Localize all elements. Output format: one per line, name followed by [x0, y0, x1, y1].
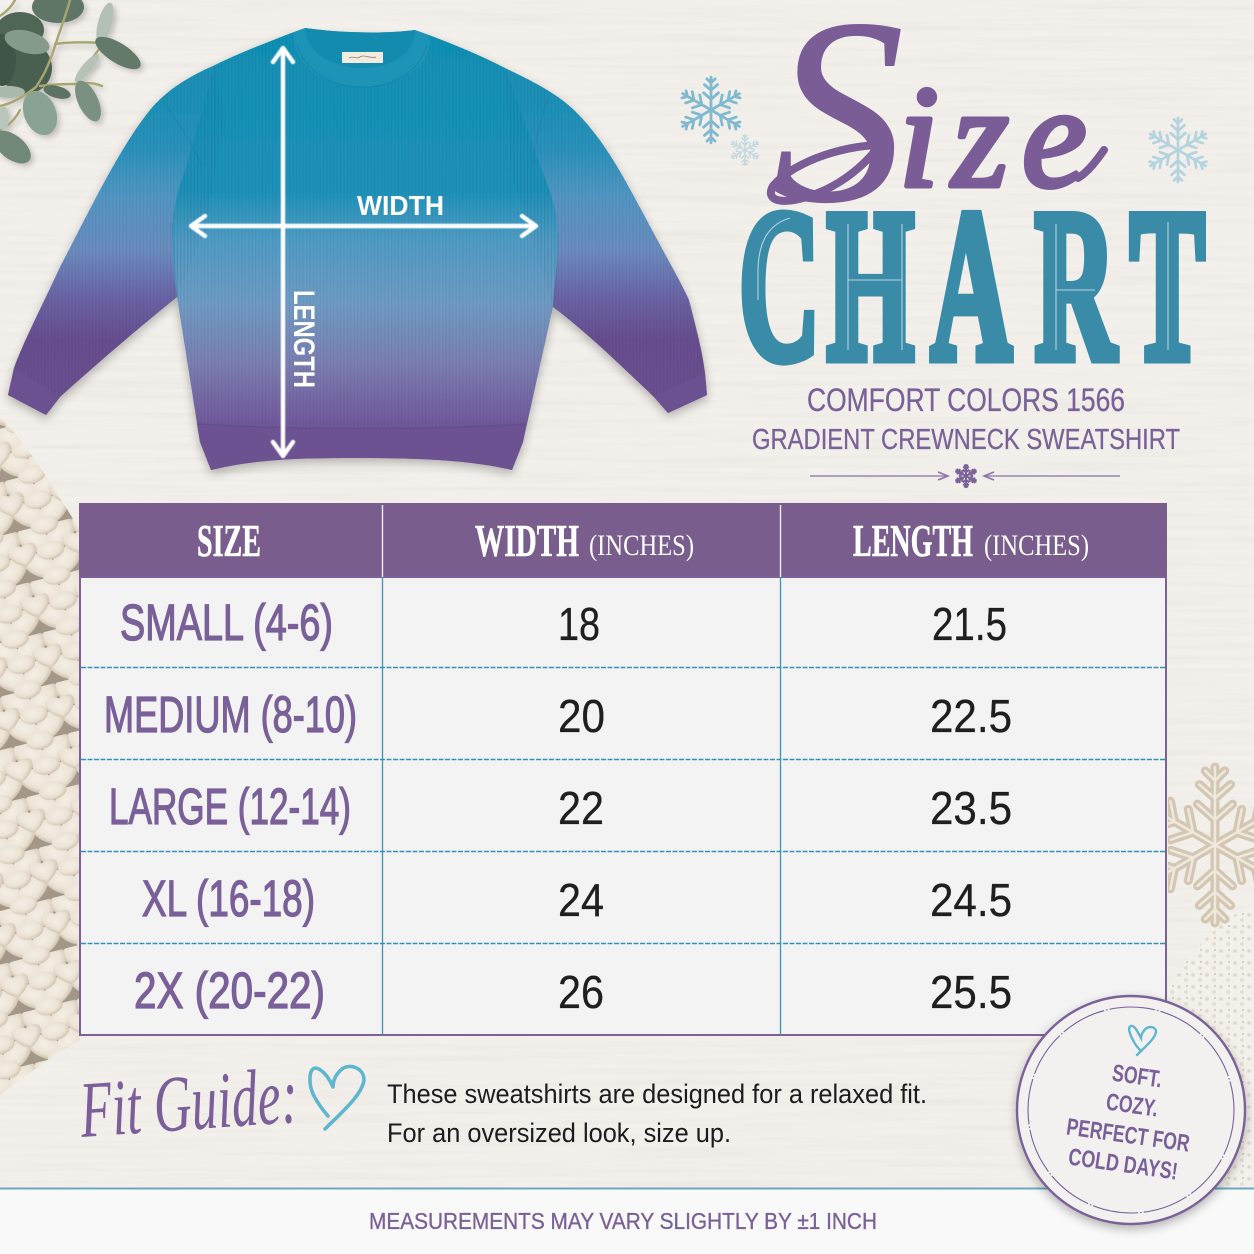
- icon: teal heart: [310, 1066, 364, 1129]
- badge text: COZY.: [1104, 1089, 1160, 1123]
- row: 2x: [134, 962, 1012, 1019]
- row: large: [109, 778, 1012, 835]
- sweatshirt illustration: [8, 28, 707, 470]
- row: 2x: 25.5: [930, 966, 1012, 1018]
- fit guide text: [387, 1079, 927, 1148]
- row: xl: 24: [558, 874, 604, 926]
- icon: small heart: [1129, 1026, 1156, 1055]
- title flourish: [771, 145, 1104, 201]
- decoration: chunky knit blanket left: [0, 418, 80, 1096]
- table: [79, 503, 1167, 1035]
- title: CHART: CHART: [739, 167, 1205, 406]
- row: medium: [104, 686, 1012, 743]
- badge: soft cozy: [1017, 996, 1245, 1224]
- title: Size: [771, 0, 1104, 258]
- arrow: width: [191, 216, 536, 236]
- header: width: (INCHES): [589, 529, 694, 562]
- right sleeve: [505, 68, 707, 413]
- header: width: WIDTH: [475, 515, 579, 566]
- icon: small pale snowflake: [730, 135, 760, 165]
- badge text: PERFECT FOR: [1065, 1114, 1191, 1158]
- row: 2x: 26: [558, 966, 604, 1018]
- cuffs: [8, 368, 60, 415]
- icon: teal snowflake left: [679, 77, 743, 143]
- icon: pale snowflake right: [1147, 118, 1209, 182]
- row: small: [120, 594, 1007, 651]
- left sleeve: [8, 65, 225, 415]
- body: [172, 32, 558, 470]
- header: size: SIZE: [197, 515, 261, 566]
- footer band: [0, 1188, 1254, 1254]
- title: Size: ize: [898, 56, 1100, 218]
- row: large: 22: [558, 782, 604, 834]
- row: xl: [142, 870, 1012, 927]
- badge text: COLD DAYS!: [1067, 1144, 1179, 1186]
- row: small: 18: [558, 598, 600, 650]
- row: large: 23.5: [930, 782, 1012, 834]
- label: width: WIDTH: [357, 190, 444, 221]
- badge text: [1065, 1060, 1191, 1186]
- label: length: LENGTH: [287, 290, 320, 388]
- sleeve seams: [165, 100, 558, 307]
- neck tag: [342, 52, 383, 63]
- chart title inline highlights: [758, 218, 1168, 350]
- decoration: fluffy blanket right: [1168, 905, 1254, 1190]
- row: medium: 20: [558, 690, 605, 742]
- row: small: SMALL (4-6): [120, 594, 333, 651]
- row: xl: 24.5: [930, 874, 1012, 926]
- badge text: SOFT.: [1110, 1060, 1164, 1093]
- footer note: MEASUREMENTS MAY VARY SLIGHTLY BY ±1 INCH: [369, 1208, 877, 1234]
- row: large: LARGE (12-14): [109, 778, 351, 835]
- hem band: [197, 424, 526, 470]
- table body: [80, 577, 1166, 1035]
- divider with snowflake: [810, 465, 1120, 487]
- arrow: length: [273, 48, 293, 456]
- fit guide text: These sweatshirts are designed for a relaxed fit.: [387, 1079, 927, 1109]
- fit guide heading: Fit Guide:: [76, 1052, 301, 1155]
- header: length: LENGTH: [853, 515, 973, 566]
- decoration: eucalyptus leaves: [0, 0, 145, 170]
- row: medium: MEDIUM (8-10): [104, 686, 357, 743]
- ribbing: [8, 32, 707, 470]
- row: xl: XL (16-18): [142, 870, 315, 927]
- decoration: glitter snowflake: [1168, 762, 1254, 928]
- fit guide text: For an oversized look, size up.: [387, 1118, 731, 1148]
- header: length: (INCHES): [984, 529, 1089, 562]
- row: medium: 22.5: [930, 690, 1012, 742]
- table header band: [79, 503, 1167, 577]
- row: small: 21.5: [932, 598, 1007, 650]
- subtitle line 1: COMFORT COLORS 1566: [807, 382, 1125, 418]
- row: 2x: 2X (20-22): [134, 962, 325, 1019]
- collar: [294, 28, 430, 87]
